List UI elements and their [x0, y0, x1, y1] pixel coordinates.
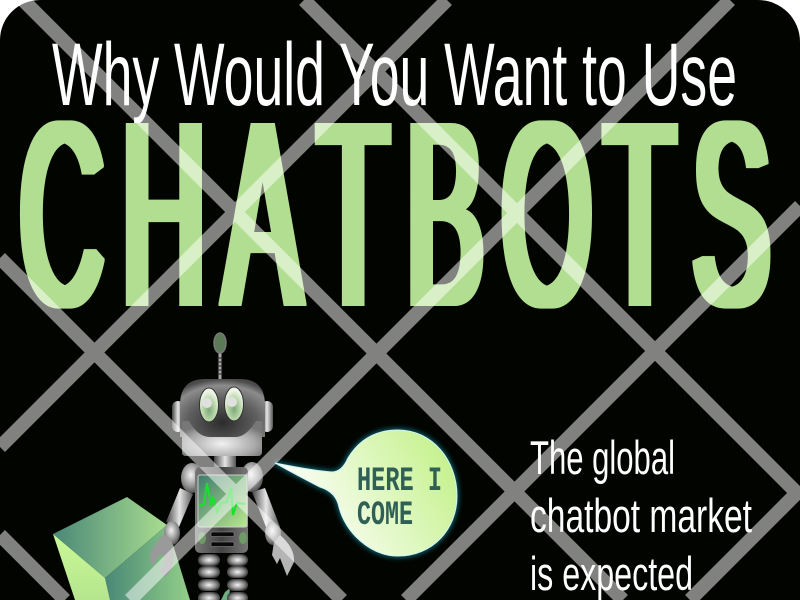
rounded top-right corner: [758, 0, 800, 42]
robot eyes: [200, 387, 244, 422]
bubble text: HERE I: [357, 463, 442, 501]
robot head: [180, 379, 265, 437]
screen pulse line: [199, 483, 245, 515]
robot arms: [150, 488, 294, 577]
bubble text: COME: [357, 497, 413, 535]
robot jaw: [182, 421, 262, 456]
robot ears: [172, 401, 273, 432]
robot legs: [198, 554, 248, 600]
robot screen: [198, 475, 247, 527]
statistic text: is expected: [530, 547, 693, 600]
rounded top-left corner: [0, 0, 40, 40]
robot antenna: [214, 333, 226, 380]
torso buttons and slots: [198, 532, 247, 546]
statistic text: The global: [530, 431, 675, 484]
icon: green cube: [53, 497, 230, 600]
robot shoulders: [181, 462, 263, 493]
robot neck: [214, 456, 236, 470]
robot torso: [195, 467, 248, 553]
robot illustration: [150, 333, 294, 600]
headline: CHATBOTS: CHATBOTS: [20, 68, 770, 362]
speech bubble: [275, 430, 462, 556]
